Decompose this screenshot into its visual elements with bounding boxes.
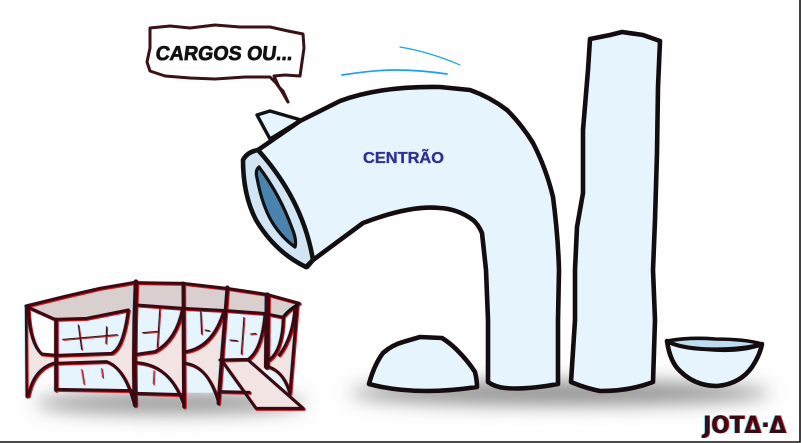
label: CENTRÃO: CENTRÃO [363, 149, 444, 167]
ground shadow: building [35, 392, 305, 414]
building outlines [26, 282, 303, 408]
signature: JOTΔ·Δ [701, 411, 786, 439]
horn on tube [257, 111, 301, 139]
building fills [26, 283, 303, 408]
speech bubble [147, 25, 304, 102]
bent tower tube [258, 87, 559, 388]
tube opening [243, 150, 313, 267]
tower pillar [571, 32, 660, 391]
ground shadow: monuments [350, 381, 770, 405]
motion lines [342, 47, 460, 75]
speech text: CARGOS OU... [154, 43, 294, 65]
bowl [667, 338, 762, 386]
dome [369, 337, 477, 391]
building: Palácio [26, 282, 303, 408]
